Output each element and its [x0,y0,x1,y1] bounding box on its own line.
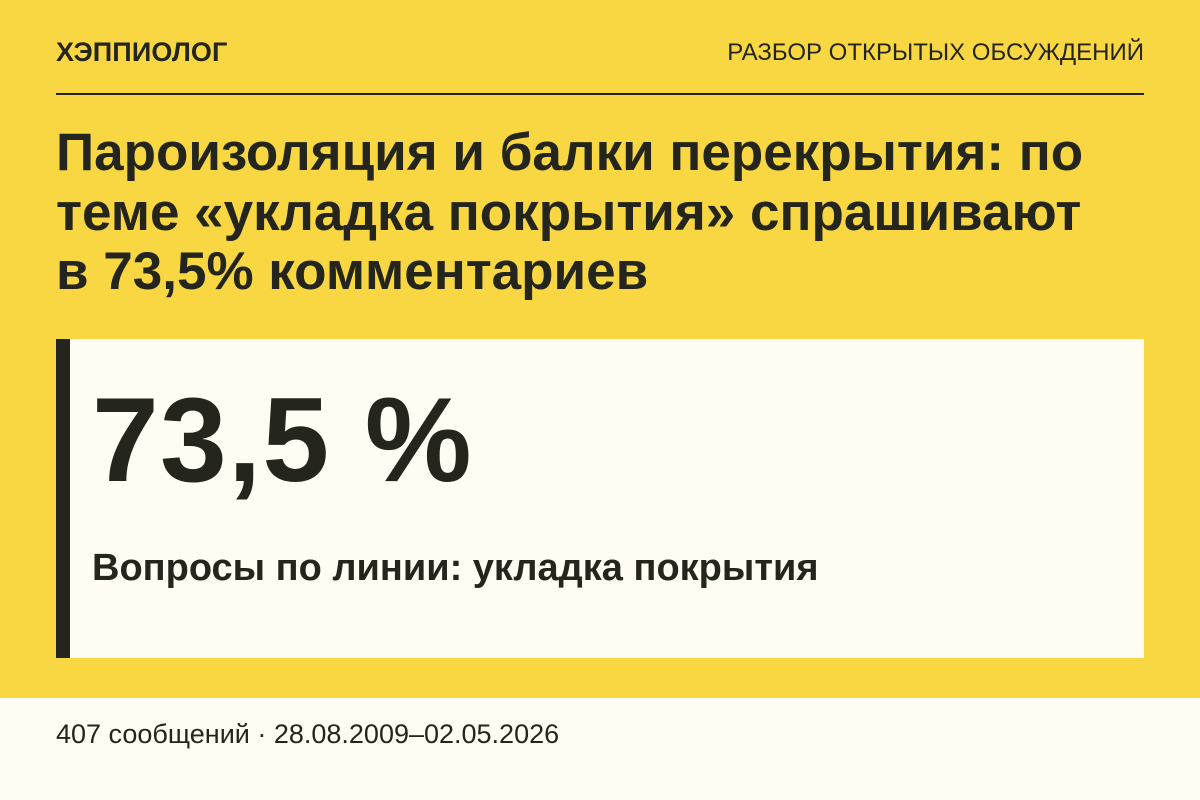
big number: 73,5 % [92,373,473,507]
header label: РАЗБОР ОТКРЫТЫХ ОБСУЖДЕНИЙ [727,39,1144,66]
title: в 73,5% комментариев [56,242,648,301]
panel accent bar [56,339,70,658]
title: Пароизоляция и балки перекрытия: по [56,123,1083,182]
footer text: 407 сообщений · 28.08.2009–02.05.2026 [56,719,559,749]
stat caption: Вопросы по линии: укладка покрытия [92,547,818,589]
title [56,123,1083,301]
footer [0,698,1200,800]
title: теме «укладка покрытия» спрашивают [56,182,1081,242]
header brand: ХЭППИОЛОГ [56,37,227,67]
panel: main stat [56,339,1144,658]
